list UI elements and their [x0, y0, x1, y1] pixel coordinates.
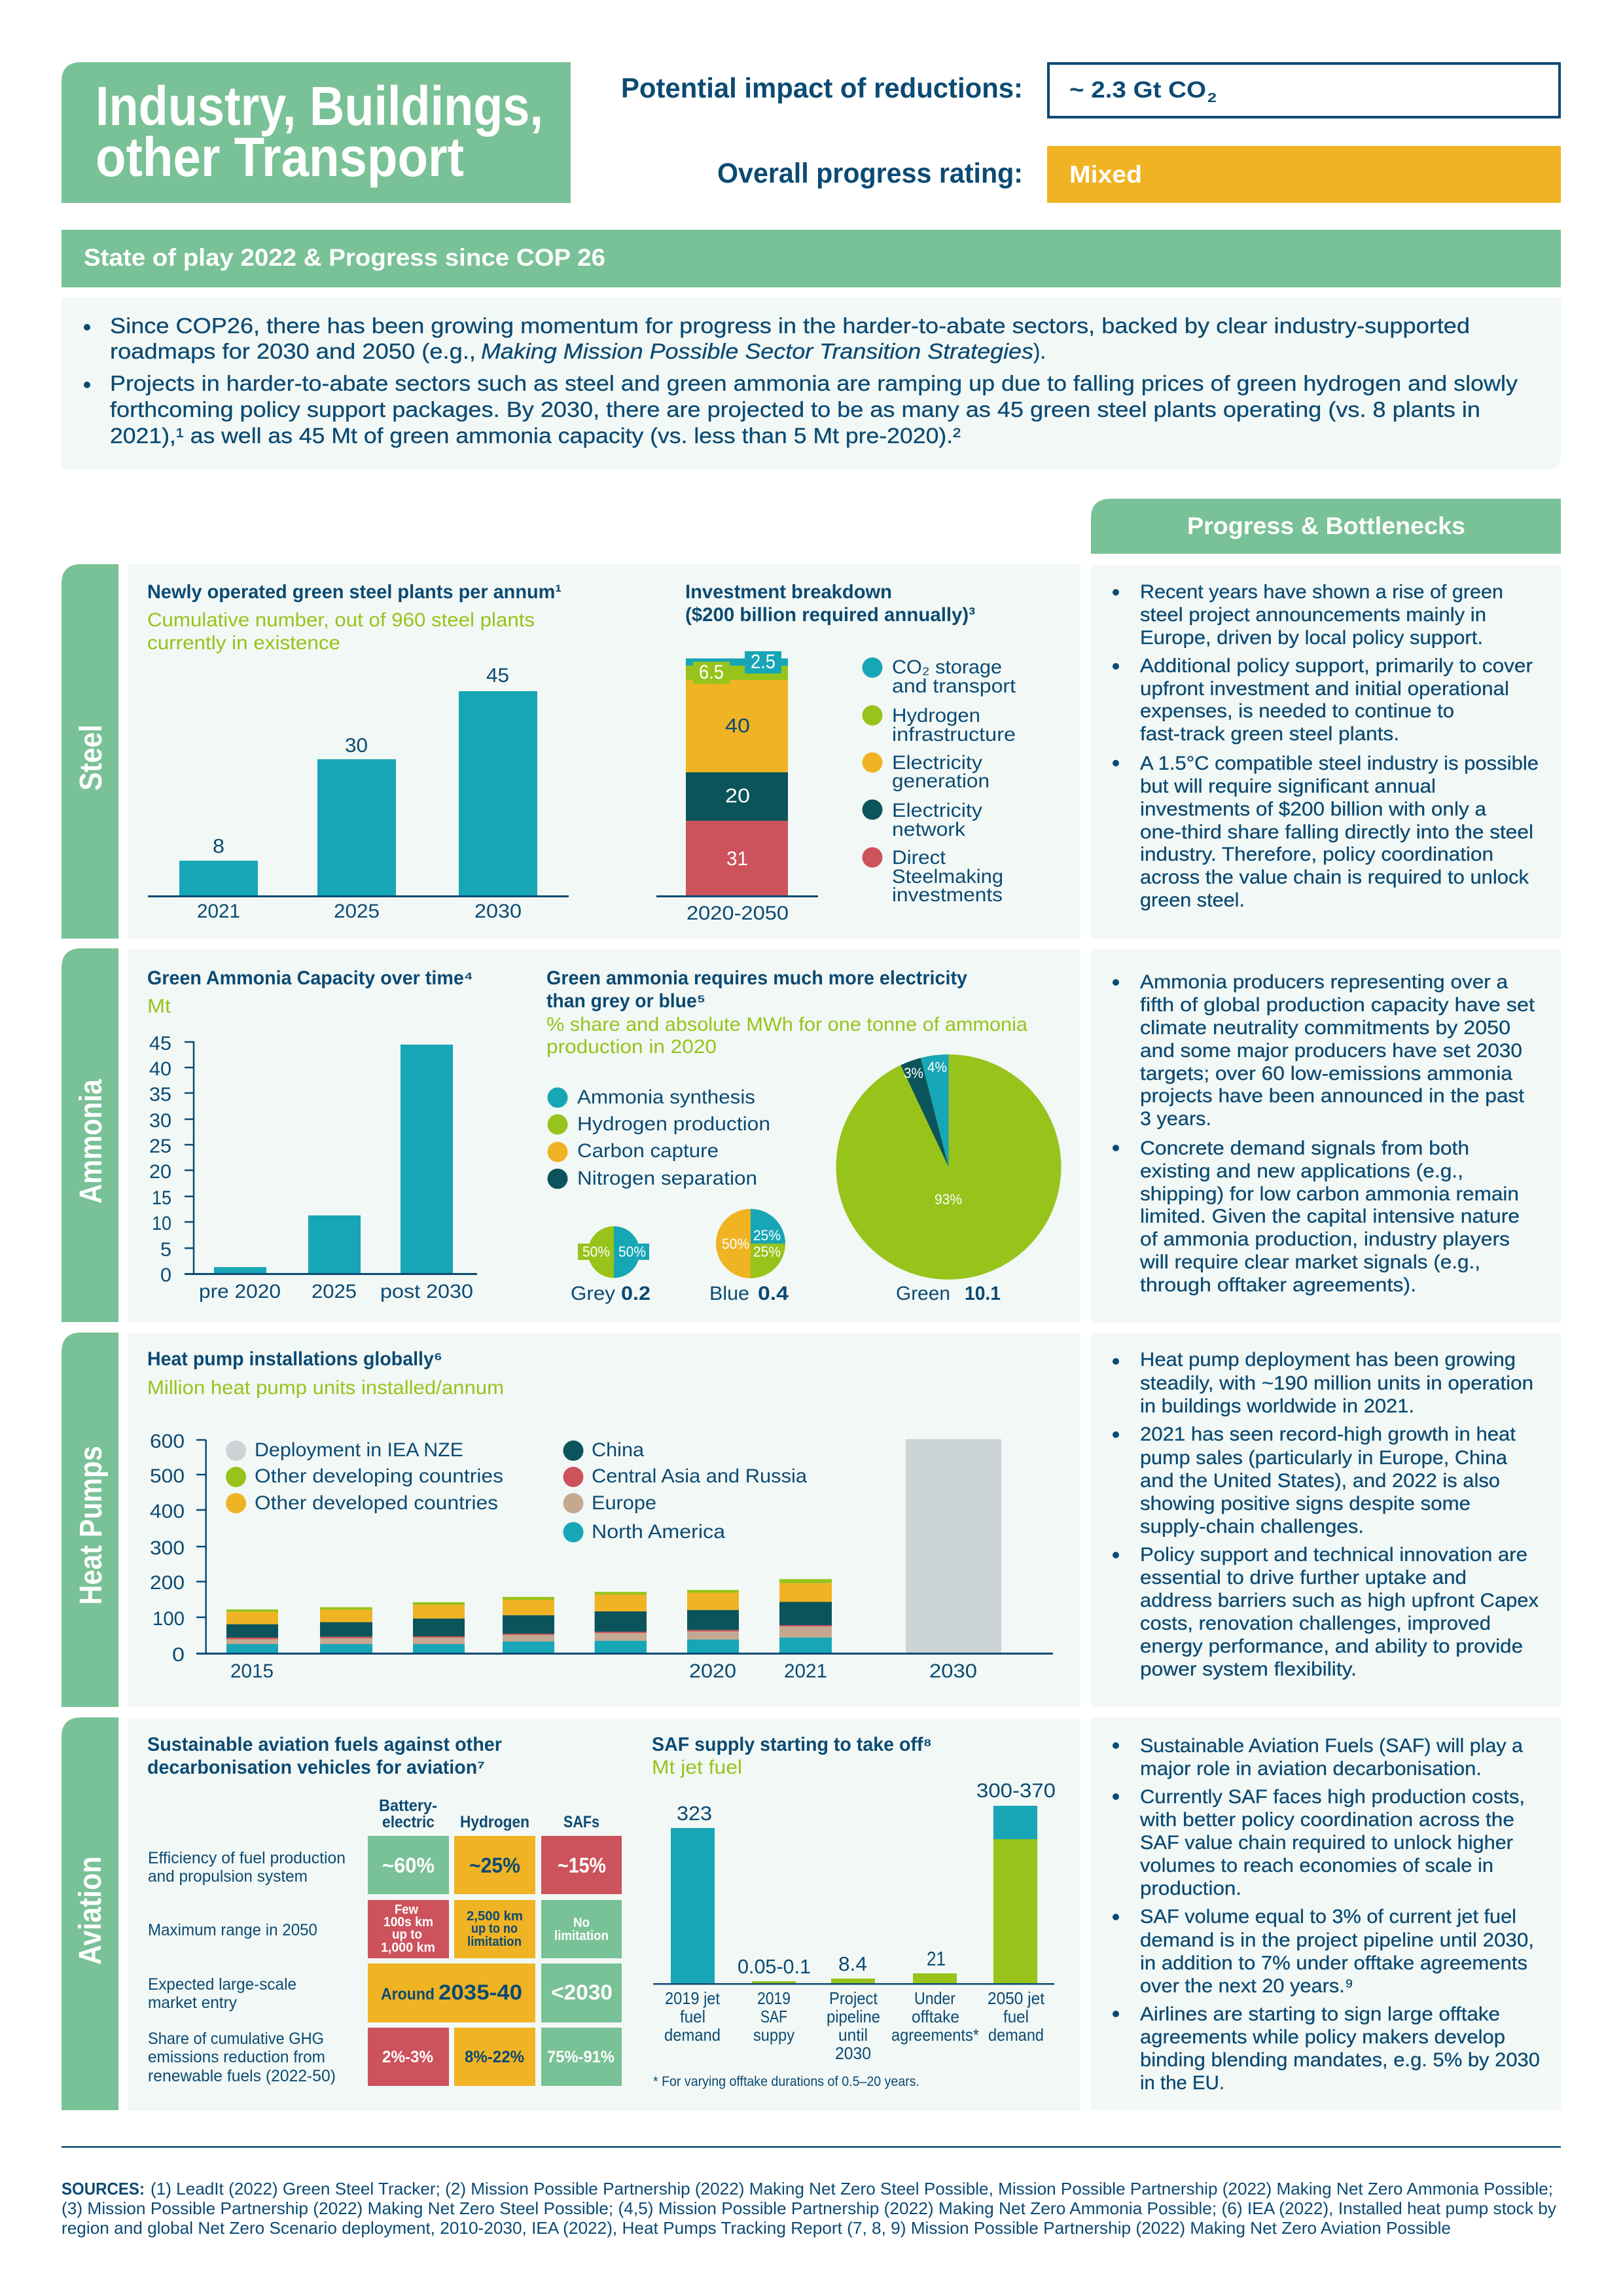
- bar chart: green ammonia capacity: 25: [149, 1136, 171, 1157]
- panel: ammonia progress text: existing and new applications (e.g.,: [1140, 1160, 1463, 1182]
- legend: investment breakdown: Steelmaking: [892, 866, 1003, 888]
- state of play text panel: forthcoming policy support packages. By 2030, there are projected to be as many as 45 green steel plants operating (vs. 8 plants in: [110, 397, 1480, 422]
- comparison table: aviation fuels: emissions reduction from: [148, 2048, 325, 2066]
- panel: steel: [62, 564, 1080, 939]
- heading: electricity comparison: Green ammonia requires much more electricity: [546, 967, 967, 989]
- panel: ammonia progress text: of ammonia production, industry players: [1140, 1229, 1510, 1250]
- legend: heat pumps: China: [592, 1439, 644, 1461]
- legend: heat pumps: North America: [592, 1521, 725, 1543]
- panel: steel progress text: Additional policy support, primarily to cover: [1140, 655, 1533, 677]
- heat pumps tab: [62, 1333, 118, 1707]
- comparison table: aviation fuels: ~25%: [469, 1854, 520, 1877]
- legend: investment breakdown: Hydrogen: [892, 705, 980, 726]
- panel: aviation progress text: SAF volume equal to 3% of current jet fuel: [1140, 1906, 1516, 1928]
- bar chart: green ammonia capacity: Mt: [147, 996, 171, 1017]
- comparison table: aviation fuels: No: [573, 1916, 590, 1930]
- state of play text panel: Since COP26, there has been growing momentum for progress in the harder-to-abate sectors, backed by clear industry-supported: [110, 314, 1470, 338]
- stacked bar: 2020: [687, 1590, 739, 1653]
- potential impact of reductions: [621, 63, 1560, 117]
- bar chart: green ammonia capacity: [147, 967, 477, 1302]
- bar chart: green ammonia capacity: 5: [160, 1239, 171, 1261]
- pie: green ammonia: 10.1: [965, 1283, 1001, 1304]
- panel: aviation progress text: binding blending mandates, e.g. 5% by 2030: [1140, 2049, 1540, 2071]
- panel: aviation progress text: Airlines are starting to sign large offtake: [1140, 2003, 1500, 2025]
- stacked bar: investment breakdown: 2.5: [751, 650, 776, 673]
- panel: aviation: [62, 1717, 1080, 2111]
- panel: heat pumps progress text: [1091, 1333, 1561, 1707]
- comparison table: aviation fuels: 2035-40: [438, 1981, 522, 2004]
- panel: aviation progress text: over the next 20 years.⁹: [1140, 1975, 1353, 1997]
- bar chart: SAF supply: fuel: [680, 2007, 705, 2026]
- heading: electricity comparison: % share and absolute MWh for one tonne of ammonia: [546, 1014, 1027, 1035]
- panel: heat pumps progress text: pump sales (particularly in Europe, China: [1140, 1447, 1507, 1469]
- comparison table: aviation fuels: Efficiency of fuel production: [148, 1849, 346, 1867]
- legend: heat pumps: Deployment in IEA NZE: [255, 1439, 463, 1461]
- panel: ammonia progress text: [1091, 949, 1561, 1323]
- sources: SOURCES:: [62, 2179, 145, 2198]
- pie: green ammonia: 93%: [935, 1191, 962, 1208]
- steel tab: [62, 564, 118, 939]
- pie: green ammonia: Green: [896, 1283, 950, 1304]
- pie: grey ammonia: Grey: [571, 1283, 615, 1304]
- panel: ammonia progress text: targets; over 60 low-emissions ammonia: [1140, 1063, 1512, 1085]
- bar chart: SAF supply: 8.4: [838, 1952, 867, 1975]
- legend: investment breakdown: Electricity: [892, 800, 982, 821]
- panel: aviation progress text: production.: [1140, 1878, 1241, 1899]
- bar chart: green ammonia capacity: post 2030: [380, 1281, 473, 1302]
- comparison table: aviation fuels: decarbonisation vehicles for aviation⁷: [147, 1757, 485, 1778]
- bar chart: SAF supply: SAF: [760, 2007, 787, 2026]
- comparison table: aviation fuels: limitation: [467, 1935, 522, 1949]
- pie: grey ammonia: [571, 1227, 651, 1304]
- bar chart: green ammonia capacity: 0: [160, 1265, 171, 1286]
- legend: ammonia electricity: Ammonia synthesis: [577, 1086, 755, 1108]
- comparison table: aviation fuels: 1,000 km: [381, 1941, 435, 1955]
- stacked bar chart: heat pumps: 200: [150, 1572, 185, 1594]
- panel: aviation progress text: Currently SAF faces high production costs,: [1140, 1786, 1525, 1808]
- comparison table: aviation fuels: and propulsion system: [148, 1867, 308, 1886]
- heading: electricity comparison: production in 2020: [546, 1036, 717, 1058]
- bar chart: SAF supply: agreements*: [891, 2025, 979, 2045]
- pie: blue ammonia: Blue: [709, 1283, 749, 1304]
- comparison table: aviation fuels: ~15%: [558, 1854, 606, 1877]
- panel: heat pumps progress text: 2021 has seen record-high growth in heat: [1140, 1424, 1516, 1445]
- comparison table: aviation fuels: Maximum range in 2050: [148, 1921, 317, 1939]
- stacked bar: 2016: [320, 1607, 372, 1653]
- panel: steel progress text: across the value chain is required to unlock: [1140, 867, 1529, 888]
- panel: aviation progress text: in the EU.: [1140, 2072, 1224, 2094]
- title block: other Transport: [96, 126, 464, 188]
- comparison table: aviation fuels: Hydrogen: [460, 1813, 529, 1831]
- legend: heat pumps: Other developing countries: [255, 1465, 503, 1487]
- panel: heat pumps progress text: showing positive signs despite some: [1140, 1493, 1471, 1515]
- legend: investment breakdown: Direct: [892, 847, 946, 869]
- legend: investment breakdown: network: [892, 819, 966, 840]
- comparison table: aviation fuels: Expected large-scale: [148, 1975, 296, 1994]
- comparison table: aviation fuels: Few: [395, 1903, 418, 1917]
- bar chart: SAF supply: suppy: [753, 2025, 794, 2045]
- stacked bar: investment breakdown: 20: [725, 784, 750, 807]
- potential impact of reductions: 2: [1207, 91, 1217, 105]
- pie: blue ammonia: 25%: [753, 1227, 781, 1244]
- panel: steel progress text: [1091, 565, 1561, 939]
- steel tab: Steel: [74, 725, 109, 791]
- bar chart: green ammonia capacity: 20: [149, 1161, 171, 1183]
- panel: ammonia progress text: projects have been announced in the past: [1140, 1085, 1525, 1107]
- comparison table: aviation fuels: <2030: [551, 1981, 613, 2004]
- comparison table: aviation fuels: 2,500 km: [467, 1909, 523, 1924]
- pie: green ammonia: 3%: [904, 1065, 923, 1081]
- title block: [62, 62, 571, 203]
- legend: heat pumps: Europe: [592, 1492, 656, 1514]
- pie: green ammonia: [836, 1054, 1061, 1304]
- stacked bar: 2019: [595, 1592, 647, 1653]
- bar chart: SAF supply: Mt jet fuel: [652, 1757, 742, 1778]
- panel: heat pumps: [62, 1333, 1080, 1707]
- stacked bar: 2015: [226, 1609, 278, 1653]
- sources: [62, 2179, 1556, 2238]
- pie: grey ammonia: 0.2: [621, 1283, 651, 1304]
- bar chart: green steel plants: 2030: [474, 901, 522, 922]
- panel: ammonia progress text: and some major producers have set 2030: [1140, 1040, 1522, 1062]
- comparison table: aviation fuels: 2%-3%: [382, 2048, 433, 2066]
- legend: heat pumps: [226, 1439, 807, 1543]
- panel: aviation progress text: Sustainable Aviation Fuels (SAF) will play a: [1140, 1735, 1523, 1757]
- panel: ammonia progress text: will require clear market signals (e.g.,: [1139, 1251, 1480, 1273]
- bar chart: SAF supply: 300-370: [976, 1779, 1056, 1802]
- title block: Industry, Buildings,: [96, 75, 543, 137]
- bar chart: SAF supply: until: [838, 2025, 868, 2045]
- bar chart: green ammonia capacity: 15: [152, 1187, 171, 1209]
- bar chart: green steel plants: [147, 581, 569, 922]
- bar chart: SAF supply: SAF supply starting to take off⁸: [652, 1734, 932, 1755]
- state of play text panel: 2021),¹ as well as 45 Mt of green ammonia capacity (vs. less than 5 Mt pre-2020).²: [110, 423, 961, 448]
- ammonia tab: [62, 948, 118, 1322]
- bar chart: green steel plants: currently in existence: [147, 632, 340, 654]
- aviation tab: Aviation: [73, 1856, 108, 1965]
- panel: heat pumps progress text: Heat pump deployment has been growing: [1140, 1349, 1516, 1371]
- bar chart: green steel plants: 45: [486, 664, 509, 687]
- bar chart: SAF supply: pipeline: [827, 2007, 880, 2026]
- comparison table: aviation fuels: Around: [381, 1985, 435, 2003]
- ammonia tab: Ammonia: [74, 1079, 109, 1204]
- stacked bar: 2018: [503, 1597, 554, 1653]
- legend: investment breakdown: generation: [892, 770, 990, 792]
- overall progress rating: [717, 146, 1561, 203]
- panel: aviation progress text: demand is in the project pipeline until 2030,: [1140, 1929, 1534, 1951]
- state of play text panel: Projects in harder-to-abate sectors such as steel and green ammonia are ramping up due to falling prices of green hydrogen and slowly: [110, 371, 1518, 395]
- panel: steel progress text: investments of $200 billion with only a: [1140, 798, 1486, 820]
- panel: steel progress text: one-third share falling directly into the steel: [1140, 821, 1533, 843]
- panel: ammonia progress text: climate neutrality commitments by 2050: [1140, 1017, 1510, 1039]
- legend: investment breakdown: investments: [892, 884, 1003, 906]
- stacked bar: investment breakdown: [656, 581, 975, 924]
- bar chart: green ammonia capacity: 45: [149, 1033, 171, 1054]
- legend: heat pumps: Other developed countries: [255, 1492, 498, 1514]
- panel: heat pumps progress text: address barriers such as high upfront Capex: [1140, 1590, 1539, 1611]
- bar chart: SAF supply: 323: [677, 1802, 712, 1825]
- pie: blue ammonia: [709, 1209, 789, 1304]
- legend: investment breakdown: Electricity: [892, 752, 982, 774]
- bar chart: SAF supply: demand: [664, 2025, 721, 2045]
- comparison table: aviation fuels: up to: [392, 1928, 422, 1942]
- panel: steel progress text: Europe, driven by local policy support.: [1140, 627, 1483, 649]
- bar chart: green ammonia capacity: 10: [152, 1213, 171, 1234]
- bar chart: SAF supply: 21: [927, 1947, 946, 1970]
- stacked bar: investment breakdown: ($200 billion required annually)³: [685, 604, 975, 626]
- comparison table: aviation fuels: renewable fuels (2022-50): [148, 2067, 336, 2085]
- comparison table: aviation fuels: ~60%: [382, 1854, 435, 1877]
- sources: region and global Net Zero Scenario deployment, 2010-2030, IEA (2022), Heat Pumps Tracking Report (7, 8, 9) Mission Possible Partnership (2022) Making Net Zero Aviation Possible: [62, 2218, 1451, 2238]
- panel: steel progress text: green steel.: [1140, 889, 1245, 911]
- bar chart: green steel plants: 30: [345, 734, 368, 757]
- comparison table: aviation fuels: Battery-: [379, 1797, 437, 1815]
- panel: aviation progress text: in addition to 7% under offtake agreements: [1140, 1952, 1527, 1974]
- stacked bar chart: heat pumps: 600: [150, 1431, 185, 1452]
- stacked bar: investment breakdown: 31: [726, 847, 748, 870]
- sources: (3) Mission Possible Partnership (2022) Making Net Zero Steel Possible; (4,5) Mission Possible Partnership (2022) Making Net Zero Ammonia Possible; (6) IEA (2022), Installed heat pump stock by: [62, 2198, 1556, 2218]
- heading: heat pump installations: Heat pump installations globally⁶: [147, 1348, 442, 1370]
- bar chart: green steel plants: 2025: [334, 901, 380, 922]
- potential impact of reductions: Potential impact of reductions:: [621, 73, 1023, 104]
- legend: ammonia electricity: Carbon capture: [577, 1140, 719, 1162]
- comparison table: aviation fuels: 8%-22%: [465, 2048, 524, 2066]
- panel: ammonia progress text: through offtaker agreements).: [1140, 1274, 1416, 1296]
- panel: ammonia progress text: 3 years.: [1140, 1108, 1211, 1130]
- overall progress rating: Mixed: [1069, 161, 1142, 188]
- stacked bar chart: heat pumps: 2021: [784, 1660, 827, 1682]
- stacked bar chart: heat pumps: 400: [150, 1501, 185, 1522]
- bar chart: SAF supply: 2019 jet: [665, 1988, 721, 2008]
- comparison table: aviation fuels: 100s km: [383, 1915, 433, 1929]
- pie: blue ammonia: 25%: [753, 1244, 781, 1260]
- panel: aviation progress text: major role in aviation decarbonisation.: [1140, 1758, 1482, 1780]
- stacked bar chart: heat pumps: 100: [152, 1608, 185, 1630]
- panel: aviation progress text: SAF value chain required to unlock higher: [1140, 1832, 1513, 1854]
- pie: grey ammonia: 50%: [618, 1244, 646, 1260]
- progress and bottlenecks heading: Progress & Bottlenecks: [1187, 512, 1465, 539]
- bar chart: SAF supply: Project: [829, 1988, 878, 2008]
- panel: aviation progress text: [1091, 1717, 1561, 2110]
- bar chart: SAF supply: demand: [988, 2025, 1044, 2045]
- bar chart: SAF supply: 2030: [835, 2043, 871, 2063]
- bar chart: green ammonia capacity: 30: [149, 1110, 171, 1132]
- state of play heading: [62, 230, 1561, 287]
- state of play heading: State of play 2022 & Progress since COP 26: [84, 244, 605, 271]
- heat pumps tab: Heat Pumps: [74, 1446, 109, 1605]
- panel: ammonia progress text: shipping) for low carbon ammonia remain: [1140, 1183, 1519, 1205]
- panel: ammonia progress text: fifth of global production capacity have set: [1140, 994, 1535, 1016]
- comparison table: aviation fuels: 75%-91%: [547, 2048, 615, 2066]
- panel: steel progress text: steel project announcements mainly in: [1140, 604, 1486, 626]
- state of play text panel: roadmaps for 2030 and 2050 (e.g.,: [110, 339, 476, 363]
- stacked bar chart: heat pumps: 500: [150, 1465, 185, 1487]
- panel: ammonia progress text: limited. Given the capital intensive nature: [1140, 1206, 1520, 1227]
- bar chart: SAF supply: Under: [914, 1988, 955, 2008]
- bar chart: SAF supply: 2050 jet: [988, 1988, 1045, 2008]
- stacked bar chart: heat pumps: 2020: [689, 1660, 736, 1682]
- comparison table: aviation fuels: SAFs: [563, 1813, 599, 1831]
- panel: heat pumps progress text: energy performance, and ability to provide: [1140, 1636, 1523, 1657]
- stacked bar: investment breakdown: 40: [725, 714, 750, 737]
- bar chart: SAF supply: [652, 1734, 1056, 2089]
- panel: heat pumps progress text: steadily, with ~190 million units in operation: [1140, 1372, 1533, 1394]
- legend: investment breakdown: CO₂ storage: [892, 656, 1002, 678]
- stacked bar: 2017: [413, 1602, 465, 1653]
- pie: grey ammonia: 50%: [582, 1244, 610, 1260]
- bar chart: green ammonia capacity: 2025: [312, 1281, 357, 1302]
- bar chart: green steel plants: 2021: [197, 901, 240, 922]
- legend: ammonia electricity: [547, 1086, 770, 1189]
- legend: ammonia electricity: Nitrogen separation: [577, 1168, 757, 1189]
- bar chart: green ammonia capacity: pre 2020: [199, 1281, 281, 1302]
- overall progress rating: Overall progress rating:: [717, 158, 1023, 189]
- panel: steel progress text: fast-track green steel plants.: [1140, 723, 1399, 745]
- stacked bar chart: heat pumps: 2015: [230, 1660, 274, 1682]
- comparison table: aviation fuels: Share of cumulative GHG: [148, 2030, 324, 2048]
- pie: blue ammonia: 0.4: [758, 1283, 789, 1304]
- state of play text panel: ).: [1033, 339, 1046, 363]
- bar chart: green steel plants: Newly operated green steel plants per annum¹: [147, 581, 562, 603]
- stacked bar chart: heat pumps: 0: [172, 1644, 185, 1666]
- comparison table: aviation fuels: up to no: [471, 1922, 518, 1936]
- sources: (1) LeadIt (2022) Green Steel Tracker; (2) Mission Possible Partnership (2022) Making Net Zero Steel Possible, Mission Possible Partnership (2022) Making Net Zero Ammonia Possible;: [151, 2179, 1553, 2198]
- comparison table: aviation fuels: Sustainable aviation fuels against other: [147, 1734, 502, 1755]
- panel: steel progress text: Recent years have shown a rise of green: [1140, 581, 1503, 603]
- potential impact of reductions: ~ 2.3 Gt CO: [1069, 77, 1206, 103]
- stacked bar: 2021: [779, 1579, 832, 1653]
- comparison table: aviation fuels: market entry: [148, 1994, 237, 2012]
- pie: blue ammonia: 50%: [722, 1236, 749, 1252]
- stacked bar chart: heat pumps: [150, 1431, 1053, 1682]
- stacked bar: investment breakdown: Investment breakdown: [685, 581, 892, 603]
- panel: steel progress text: but will require significant annual: [1140, 776, 1436, 797]
- bar chart: green steel plants: Cumulative number, out of 960 steel plants: [147, 609, 535, 631]
- panel: steel progress text: A 1.5°C compatible steel industry is possible: [1140, 753, 1539, 774]
- legend: investment breakdown: [863, 656, 1016, 906]
- panel: heat pumps progress text: supply-chain challenges.: [1140, 1516, 1364, 1537]
- bar chart: green ammonia capacity: 40: [149, 1058, 171, 1080]
- panel: heat pumps progress text: in buildings worldwide in 2021.: [1140, 1395, 1414, 1417]
- panel: heat pumps progress text: essential to drive further uptake and: [1140, 1567, 1467, 1588]
- comparison table: aviation fuels: [147, 1734, 622, 2086]
- stacked bar: investment breakdown: 6.5: [699, 660, 724, 683]
- legend: ammonia electricity: Hydrogen production: [577, 1113, 770, 1135]
- bar chart: SAF supply: fuel: [1003, 2007, 1029, 2026]
- stacked bar chart: heat pumps: 300: [150, 1537, 185, 1559]
- stacked bar: investment breakdown: 2020-2050: [687, 903, 789, 924]
- aviation tab: [62, 1717, 118, 2110]
- state of play text panel: Making Mission Possible Sector Transition Strategies: [481, 339, 1033, 363]
- bar chart: SAF supply: 0.05-0.1: [738, 1955, 811, 1978]
- panel: steel progress text: industry. Therefore, policy coordination: [1140, 844, 1493, 865]
- bar chart: green steel plants: 8: [213, 834, 224, 857]
- panel: heat pumps progress text: power system flexibility.: [1140, 1659, 1357, 1680]
- panel: aviation progress text: volumes to reach economies of scale in: [1140, 1855, 1493, 1876]
- panel: aviation progress text: with better policy coordination across the: [1139, 1809, 1514, 1831]
- bar chart: green ammonia capacity: Green Ammonia Capacity over time⁴: [147, 967, 473, 989]
- legend: heat pumps: Central Asia and Russia: [592, 1465, 807, 1487]
- panel: steel progress text: upfront investment and initial operational: [1140, 678, 1509, 700]
- heading: heat pump installations: Million heat pump units installed/annum: [147, 1377, 504, 1399]
- heading: electricity comparison: [546, 967, 1027, 1058]
- progress and bottlenecks heading: [1091, 499, 1561, 554]
- legend: investment breakdown: infrastructure: [892, 724, 1016, 745]
- bar chart: SAF supply: * For varying offtake durations of 0.5–20 years.: [653, 2074, 919, 2089]
- bar chart: green ammonia capacity: 35: [149, 1084, 171, 1105]
- panel: aviation progress text: agreements while policy makers develop: [1140, 2026, 1505, 2048]
- panel: heat pumps progress text: costs, renovation challenges, improved: [1140, 1613, 1491, 1634]
- panel: ammonia: [62, 948, 1080, 1322]
- heading: electricity comparison: than grey or blue⁵: [546, 990, 705, 1012]
- panel: ammonia progress text: Ammonia producers representing over a: [1140, 971, 1508, 993]
- panel: ammonia progress text: Concrete demand signals from both: [1140, 1138, 1469, 1159]
- bar chart: SAF supply: offtake: [912, 2007, 959, 2026]
- comparison table: aviation fuels: limitation: [554, 1929, 609, 1943]
- heading: heat pump installations: [147, 1348, 504, 1399]
- bar chart: SAF supply: 2019: [757, 1988, 791, 2008]
- legend: investment breakdown: and transport: [892, 675, 1016, 697]
- comparison table: aviation fuels: electric: [382, 1813, 435, 1831]
- panel: steel progress text: expenses, is needed to continue to: [1140, 700, 1454, 722]
- panel: heat pumps progress text: Policy support and technical innovation are: [1140, 1544, 1527, 1566]
- state of play text panel: [62, 298, 1561, 469]
- stacked bar chart: heat pumps: 2030: [929, 1660, 977, 1682]
- panel: heat pumps progress text: and the United States), and 2022 is also: [1140, 1470, 1500, 1492]
- pie: green ammonia: 4%: [927, 1059, 947, 1075]
